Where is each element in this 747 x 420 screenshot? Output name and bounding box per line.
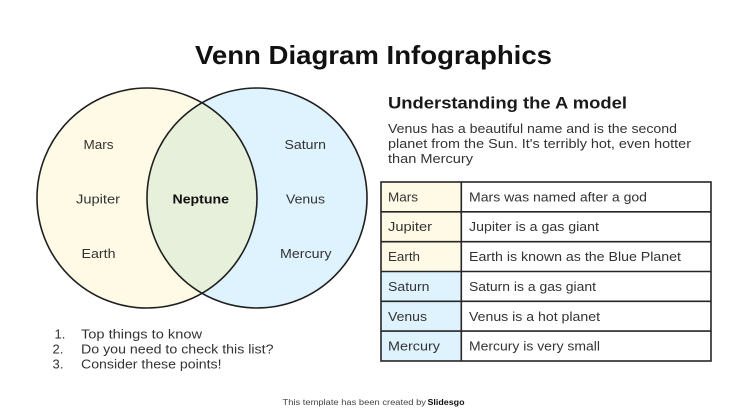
row: Jupiter <box>388 219 599 234</box>
list item 3: 3. <box>52 356 63 372</box>
footer credit: This template has been created by <box>282 398 426 407</box>
numbered list <box>52 326 274 372</box>
label: Neptune: Neptune <box>172 192 229 206</box>
description paragraph: than Mercury <box>388 151 474 166</box>
list item 1: Top things to know <box>81 326 203 342</box>
left circle <box>37 88 257 308</box>
row: Earth: Earth is known as the Blue Planet <box>469 249 681 264</box>
row: Venus <box>388 309 600 324</box>
table grid <box>381 182 711 361</box>
row: Saturn <box>388 279 596 294</box>
label: Venus: Venus <box>286 192 326 206</box>
row: Saturn: Saturn <box>388 279 430 294</box>
description paragraph: Venus has a beautiful name and is the second <box>388 121 677 136</box>
row: Mars <box>388 190 647 204</box>
row: Mercury <box>388 338 600 354</box>
row: Saturn: Saturn is a gas giant <box>469 279 596 294</box>
label: Jupiter: Jupiter <box>76 192 121 206</box>
description paragraph: planet from the Sun. It's terribly hot, even hotter <box>388 136 692 151</box>
footer credit: Slidesgo <box>428 398 465 407</box>
label: Saturn: Saturn <box>284 137 326 152</box>
subheading: Understanding the A model <box>388 94 627 112</box>
row: Mars: Mars <box>388 190 419 204</box>
row: Mars: Mars was named after a god <box>469 190 647 204</box>
row: Earth <box>388 249 681 264</box>
list item 1: 1. <box>54 326 65 342</box>
label: Mars: Mars <box>84 137 114 152</box>
table <box>381 182 711 361</box>
list item 2: 2. <box>52 342 63 356</box>
row: Earth: Earth <box>388 249 420 264</box>
list item 3: Consider these points! <box>81 356 222 372</box>
circle outlines <box>37 88 367 308</box>
description paragraph <box>388 121 692 166</box>
right circle <box>147 88 367 308</box>
title: Venn Diagram Infographics <box>195 40 552 70</box>
overlap region <box>147 103 257 293</box>
table cell fills <box>381 182 461 361</box>
row: Mercury: Mercury is very small <box>469 338 600 354</box>
row: Venus: Venus <box>388 309 428 324</box>
row: Venus: Venus is a hot planet <box>469 309 600 324</box>
row: Jupiter: Jupiter is a gas giant <box>469 219 599 234</box>
label: Earth: Earth <box>82 246 116 261</box>
row: Jupiter: Jupiter <box>388 219 433 234</box>
list item 2: Do you need to check this list? <box>81 342 274 356</box>
label: Mercury: Mercury <box>280 246 332 261</box>
footer credit <box>282 398 465 407</box>
row: Mercury: Mercury <box>388 338 441 354</box>
venn diagram <box>37 88 367 308</box>
